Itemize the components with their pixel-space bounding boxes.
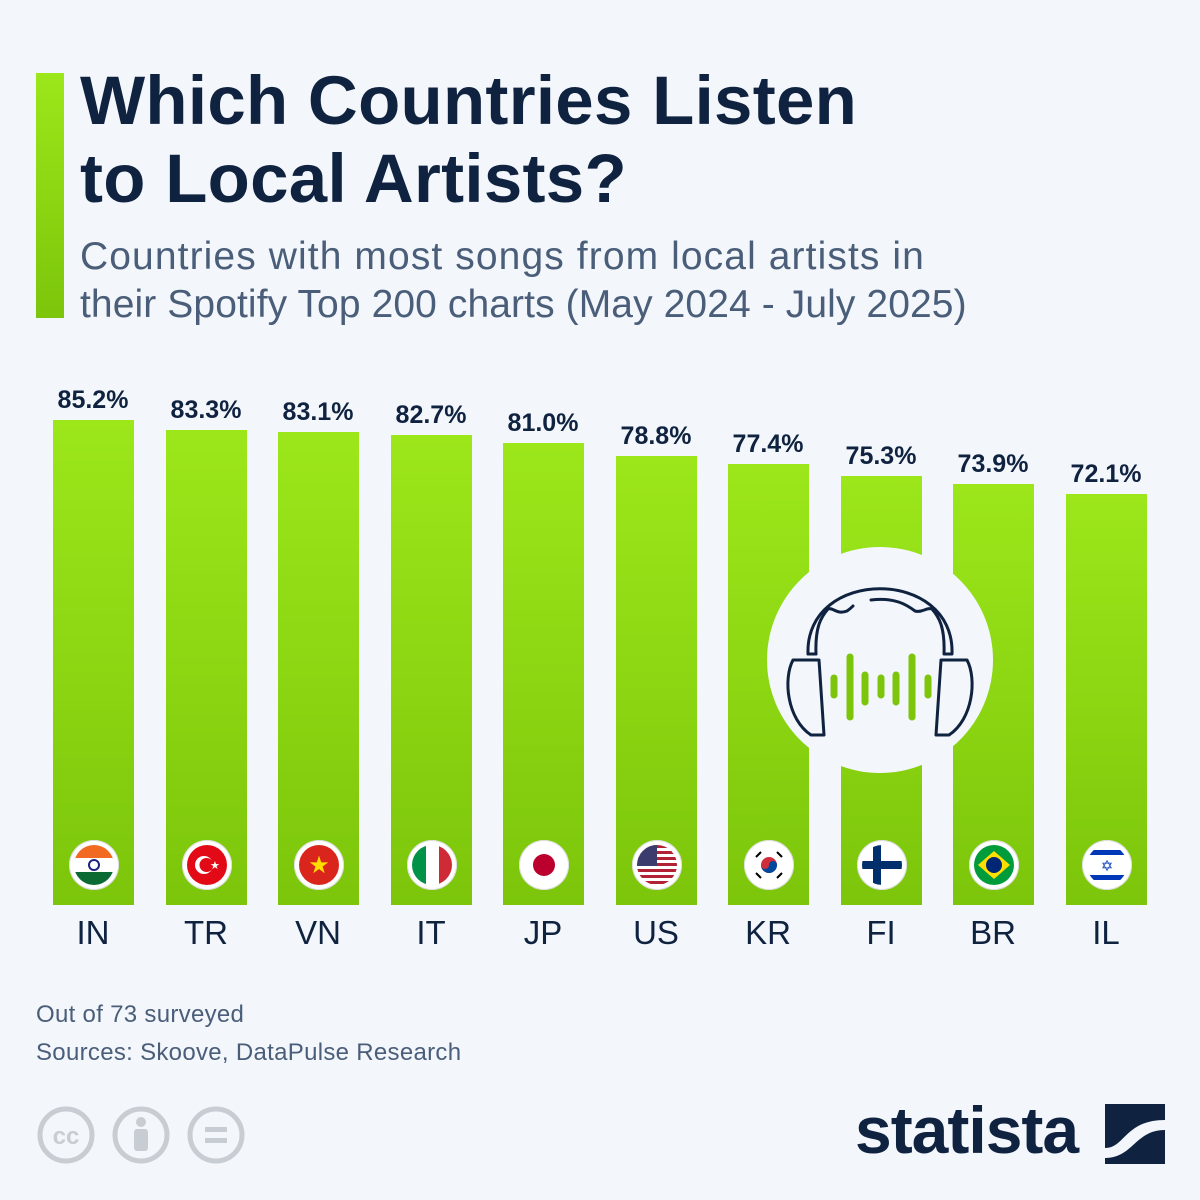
flag IL bbox=[1082, 840, 1132, 890]
value labels: 73.9% bbox=[958, 450, 1028, 478]
value labels: 83.1% bbox=[283, 398, 353, 426]
flag TR bbox=[182, 840, 232, 890]
title: Which Countries Listen bbox=[80, 62, 857, 139]
country labels: FI bbox=[866, 914, 896, 951]
bar IN bbox=[53, 420, 134, 905]
title: to Local Artists? bbox=[80, 140, 627, 217]
bar KR bbox=[728, 464, 809, 905]
footnote bbox=[36, 1001, 461, 1066]
value labels: 75.3% bbox=[846, 442, 916, 470]
value labels: 85.2% bbox=[58, 386, 128, 414]
flags bbox=[69, 840, 1132, 890]
bar BR bbox=[953, 484, 1034, 905]
country labels: IT bbox=[416, 914, 446, 951]
bar US bbox=[616, 456, 697, 905]
flag IN bbox=[69, 840, 119, 890]
footnote: Sources: Skoove, DataPulse Research bbox=[36, 1039, 461, 1066]
country labels: JP bbox=[524, 914, 562, 951]
footnote: Out of 73 surveyed bbox=[36, 1001, 244, 1028]
flag BR bbox=[969, 840, 1019, 890]
value labels: 81.0% bbox=[508, 409, 578, 437]
flag US bbox=[632, 840, 682, 890]
flag VN: ★ bbox=[308, 852, 330, 879]
country labels: IN bbox=[76, 914, 110, 951]
statista logo: statista bbox=[855, 1093, 1078, 1167]
title bbox=[80, 62, 857, 217]
country labels: VN bbox=[295, 914, 341, 951]
flag FI bbox=[857, 840, 907, 890]
bar VN bbox=[278, 432, 359, 905]
country labels: US bbox=[633, 914, 679, 951]
bar FI bbox=[841, 476, 922, 905]
value labels: 83.3% bbox=[171, 396, 241, 424]
value labels: 82.7% bbox=[396, 401, 466, 429]
value labels bbox=[58, 386, 1141, 488]
flag IL: ✡ bbox=[1101, 858, 1113, 875]
subtitle: their Spotify Top 200 charts (May 2024 - July 2025) bbox=[80, 283, 967, 326]
bar chart bbox=[53, 420, 1147, 905]
flag JP bbox=[519, 840, 569, 890]
flag KR bbox=[744, 840, 794, 890]
country labels: BR bbox=[970, 914, 1016, 951]
flag IT bbox=[407, 840, 457, 890]
subtitle: Countries with most songs from local artists in bbox=[80, 235, 925, 278]
value labels: 72.1% bbox=[1071, 460, 1141, 488]
flag VN bbox=[294, 840, 344, 890]
value labels: 77.4% bbox=[733, 430, 803, 458]
country labels bbox=[76, 914, 1120, 951]
country labels: TR bbox=[184, 914, 228, 951]
bar IL bbox=[1066, 494, 1147, 905]
accent bar bbox=[36, 73, 64, 318]
subtitle bbox=[80, 235, 967, 326]
icon: headphones bbox=[767, 547, 993, 773]
license icons bbox=[38, 1106, 244, 1164]
bar JP bbox=[503, 443, 584, 905]
flag TR: ★ bbox=[210, 860, 220, 872]
country labels: KR bbox=[745, 914, 791, 951]
bar IT bbox=[391, 435, 472, 905]
bar TR bbox=[166, 430, 247, 905]
country labels: IL bbox=[1092, 914, 1120, 951]
value labels: 78.8% bbox=[621, 422, 691, 450]
license icons: cc bbox=[53, 1123, 79, 1150]
